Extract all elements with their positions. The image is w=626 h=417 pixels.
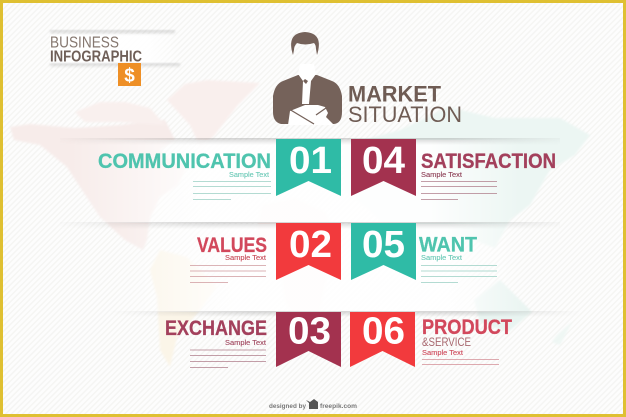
block: exchange: EXCHANGE [165,317,267,340]
block: satisfaction [421,150,556,200]
ribbon 05 [351,223,416,280]
credit: designed by freepik: designed by [269,403,306,410]
ribbon 06 [350,310,415,367]
ribbon 03: 03 [288,310,331,352]
ribbon 02 [276,223,341,280]
block: values: VALUES [197,234,267,257]
block: satisfaction: SATISFACTION [421,150,556,173]
block: communication: Sample Text [229,170,270,179]
block: want: Sample Text [421,253,463,262]
block: product and service: &SERVICE [422,337,471,349]
ribbon 01 [276,139,341,196]
block: product and service [422,316,512,364]
block: values: Sample Text [225,253,267,262]
ribbon 03 [276,310,341,367]
credit: designed by freepik: freepik.com [320,403,357,410]
block: satisfaction: Sample Text [421,170,463,179]
white bands [60,138,580,317]
heading: market situation: SITUATION [348,102,462,127]
heading: market situation: MARKET [348,82,441,106]
block: product and service: Sample Text [422,348,464,357]
icon: businessman [273,32,342,125]
business infographic title [50,30,180,68]
block: want [419,234,497,282]
block: communication [98,150,271,200]
business infographic title: INFOGRAPHIC [50,48,142,66]
ribbon 04 [351,139,416,196]
credit: designed by freepik [269,399,357,410]
block: exchange: Sample Text [225,338,267,347]
block: exchange [165,317,267,368]
block: product and service: PRODUCT [422,316,512,339]
block: values [190,234,267,282]
business infographic title: BUSINESS [50,34,119,52]
ribbon 04: 04 [362,140,405,182]
world map [10,80,590,367]
block: want: WANT [419,234,477,256]
heading: market situation [348,82,462,127]
icon: dollar badge [118,63,141,86]
ribbon 01: 01 [289,140,332,182]
ribbon 05: 05 [362,224,405,266]
ribbon 06: 06 [362,310,405,352]
block: communication: COMMUNICATION [98,150,271,173]
ribbon 02: 02 [289,224,332,266]
icon: dollar badge: $ [124,66,135,86]
